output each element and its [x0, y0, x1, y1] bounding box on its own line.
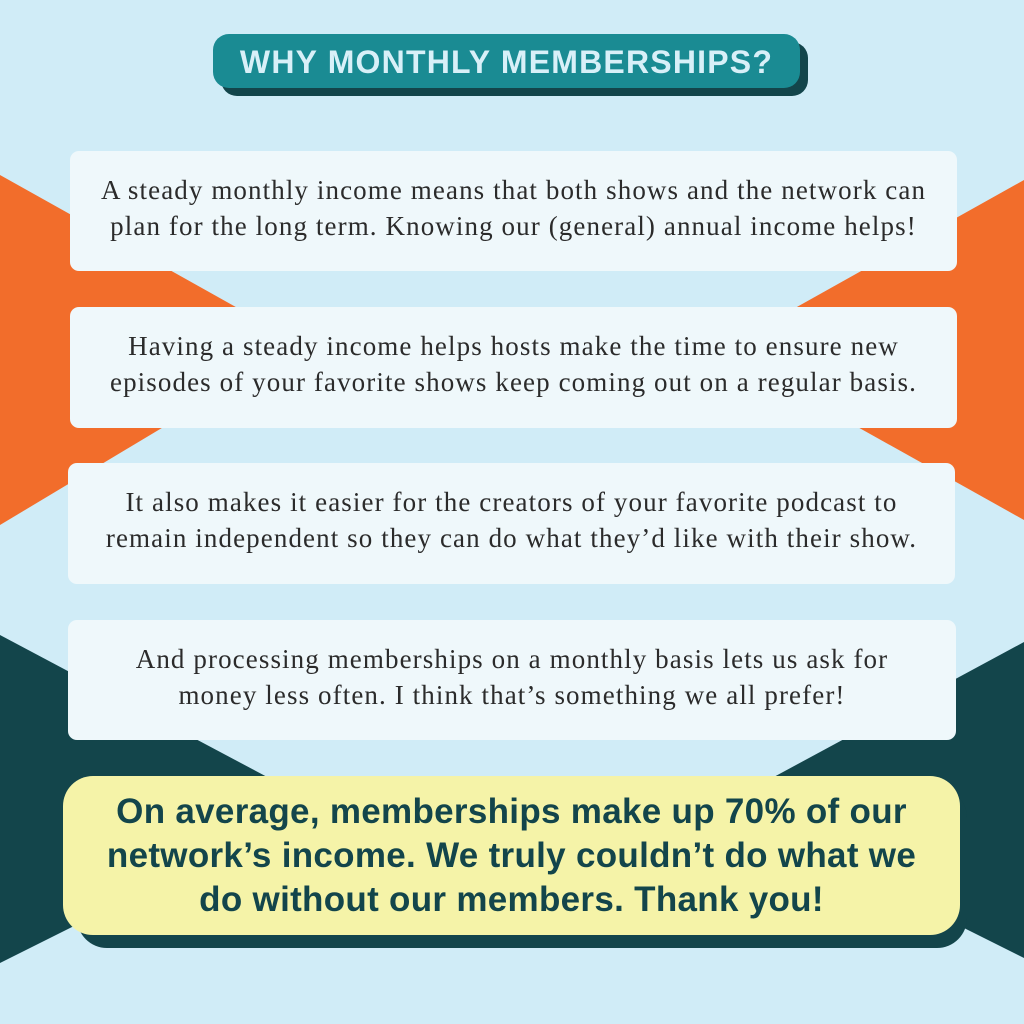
panel: box 1	[70, 151, 957, 271]
callout: thank you	[63, 776, 965, 948]
callout: thank you: do without our members. Thank you!	[199, 880, 824, 918]
callout: thank you: On average, memberships make up 70% of our	[116, 792, 907, 830]
callout: thank you: network’s income. We truly couldn’t do what we	[107, 836, 916, 874]
panel: box 2	[70, 307, 957, 428]
panel: box 4	[68, 620, 956, 740]
panel: box 4: money less often. I think that’s something we all prefer!	[178, 680, 846, 710]
panel: box 2: episodes of your favorite shows keep coming out on a regular basis.	[110, 367, 917, 397]
shape: teal left	[0, 635, 318, 963]
shape: teal right	[720, 642, 1024, 958]
title pill	[213, 34, 808, 96]
panel: box 1: A steady monthly income means that both shows and the network can	[101, 174, 926, 204]
panel: box 1: plan for the long term. Knowing our (general) annual income helps!	[110, 210, 917, 240]
panel: box 3: It also makes it easier for the creators of your favorite podcast to	[125, 487, 898, 517]
panel: box 2: Having a steady income helps hosts make the time to ensure new	[128, 331, 899, 361]
title pill: WHY MONTHLY MEMBERSHIPS?	[240, 44, 773, 80]
shape: orange right	[720, 180, 1024, 520]
shape: orange left	[0, 175, 302, 525]
panel: box 3	[68, 463, 955, 584]
panel: box 4: And processing memberships on a monthly basis lets us ask for	[136, 644, 888, 674]
panel: box 3: remain independent so they can do what they’d like with their show.	[106, 523, 917, 553]
